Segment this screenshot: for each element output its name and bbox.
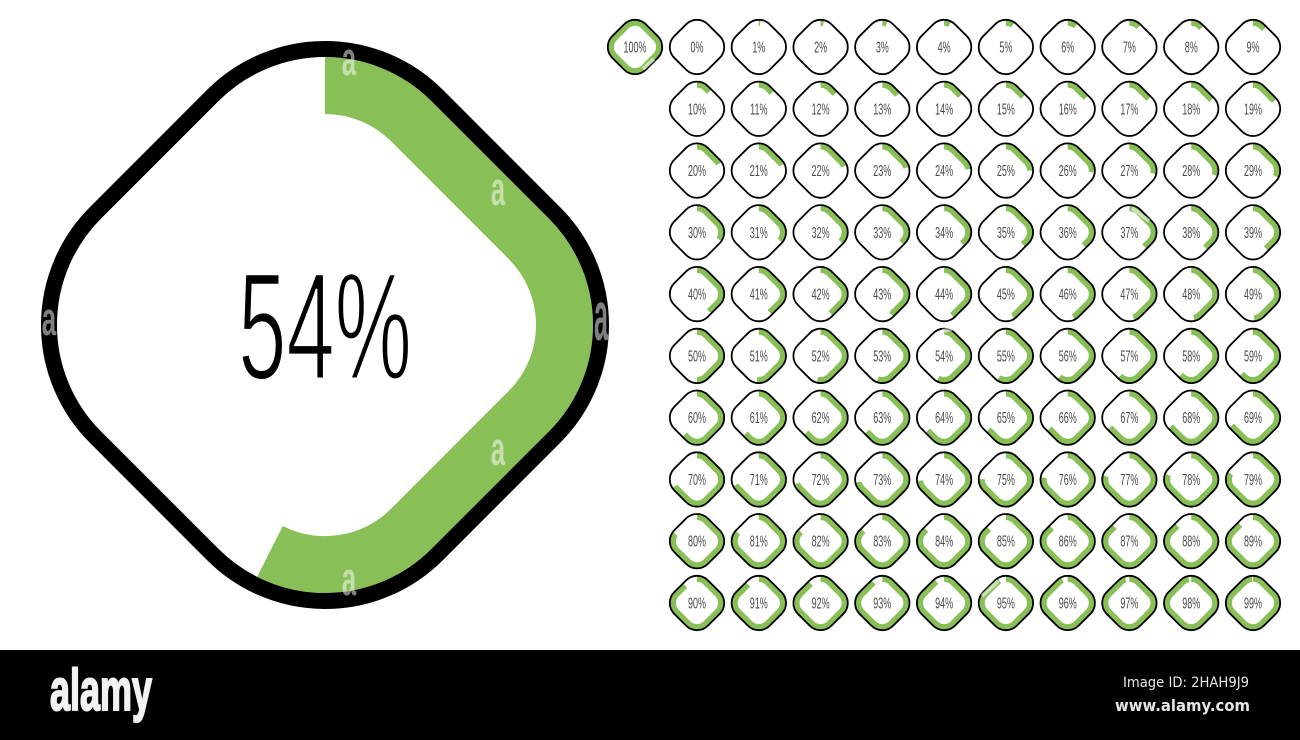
gauge 0%: 0% bbox=[691, 39, 703, 56]
gauge 93%: 93% bbox=[873, 595, 891, 612]
gauge 69%: 69% bbox=[1244, 410, 1262, 427]
gauge 77% bbox=[1102, 452, 1157, 507]
gauge 67%: 67% bbox=[1120, 410, 1138, 427]
gauge 91% bbox=[732, 576, 786, 630]
gauge 57% bbox=[1102, 329, 1157, 383]
small gauge grid bbox=[608, 20, 1280, 630]
gauge 95%: 95% bbox=[997, 595, 1015, 612]
gauge 31% bbox=[732, 205, 786, 260]
gauge 25%: 25% bbox=[997, 163, 1015, 180]
gauge 81%: 81% bbox=[750, 533, 768, 550]
watermark letters bbox=[42, 34, 608, 606]
gauge 31%: 31% bbox=[750, 224, 768, 241]
gauge 8% bbox=[1164, 20, 1218, 74]
gauge 95% bbox=[979, 576, 1033, 630]
gauge 82%: 82% bbox=[812, 533, 830, 550]
gauge 30%: 30% bbox=[688, 224, 706, 241]
gauge 64%: 64% bbox=[935, 410, 953, 427]
gauge 57%: 57% bbox=[1120, 348, 1138, 365]
gauge 46% bbox=[1040, 267, 1095, 321]
gauge 86% bbox=[1040, 514, 1095, 568]
gauge 16%: 16% bbox=[1059, 101, 1077, 118]
gauge 65%: 65% bbox=[997, 410, 1015, 427]
gauge 3% bbox=[855, 20, 910, 74]
gauge 47%: 47% bbox=[1120, 286, 1138, 303]
gauge 43%: 43% bbox=[873, 286, 891, 303]
gauge 15%: 15% bbox=[997, 101, 1015, 118]
gauge 6% bbox=[1040, 20, 1095, 74]
gauge 18% bbox=[1164, 82, 1218, 136]
large gauge: 54% bbox=[49, 49, 601, 601]
gauge 76%: 76% bbox=[1059, 472, 1077, 489]
gauge 89% bbox=[1226, 514, 1280, 568]
gauge 28%: 28% bbox=[1182, 163, 1200, 180]
gauge 37% bbox=[1102, 205, 1157, 260]
gauge 96% bbox=[1040, 576, 1095, 630]
gauge 16% bbox=[1040, 82, 1095, 136]
gauge 39%: 39% bbox=[1244, 224, 1262, 241]
large gauge green arc bbox=[85, 86, 565, 565]
gauge 56% bbox=[1040, 329, 1095, 383]
watermark letters: a bbox=[491, 164, 506, 216]
gauge 12% bbox=[793, 82, 848, 136]
gauge 41% bbox=[732, 267, 786, 321]
gauge 58% bbox=[1164, 329, 1218, 383]
gauge 4%: 4% bbox=[938, 39, 951, 56]
gauge 75% bbox=[979, 452, 1033, 507]
watermark letters: a bbox=[594, 277, 608, 356]
gauge 97% bbox=[1102, 576, 1157, 630]
gauge 56%: 56% bbox=[1059, 348, 1077, 365]
gauge 26%: 26% bbox=[1059, 163, 1077, 180]
gauge 27%: 27% bbox=[1120, 163, 1138, 180]
image id: Image ID: 2HAH9J9 bbox=[1123, 675, 1249, 691]
gauge 78%: 78% bbox=[1182, 472, 1200, 489]
gauge 45% bbox=[979, 267, 1033, 321]
gauge 62%: 62% bbox=[812, 410, 830, 427]
gauge 91%: 91% bbox=[750, 595, 768, 612]
gauge 63%: 63% bbox=[873, 410, 891, 427]
gauge 60% bbox=[670, 390, 724, 445]
gauge 29%: 29% bbox=[1244, 163, 1262, 180]
gauge 74% bbox=[917, 452, 971, 507]
large gauge value: 54% bbox=[238, 241, 412, 412]
gauge 62% bbox=[793, 390, 848, 445]
gauge 37%: 37% bbox=[1120, 224, 1138, 241]
gauge 80% bbox=[670, 514, 724, 568]
gauge 67% bbox=[1102, 390, 1157, 445]
gauge 87%: 87% bbox=[1120, 533, 1138, 550]
gauge 70% bbox=[670, 452, 724, 507]
gauge 69% bbox=[1226, 390, 1280, 445]
gauge 14%: 14% bbox=[935, 101, 953, 118]
gauge 78% bbox=[1164, 452, 1218, 507]
gauge 34% bbox=[917, 205, 971, 260]
gauge 84%: 84% bbox=[935, 533, 953, 550]
gauge 43% bbox=[855, 267, 910, 321]
gauge 68% bbox=[1164, 390, 1218, 445]
gauge 8%: 8% bbox=[1185, 39, 1198, 56]
gauge 94%: 94% bbox=[935, 595, 953, 612]
gauge 17%: 17% bbox=[1120, 101, 1138, 118]
gauge 74%: 74% bbox=[935, 472, 953, 489]
gauge 99% bbox=[1226, 576, 1280, 630]
gauge 59%: 59% bbox=[1244, 348, 1262, 365]
gauge 87% bbox=[1102, 514, 1157, 568]
gauge 6%: 6% bbox=[1061, 39, 1074, 56]
gauge 4% bbox=[917, 20, 971, 74]
gauge 79%: 79% bbox=[1244, 472, 1262, 489]
gauge 55%: 55% bbox=[997, 348, 1015, 365]
gauge 89%: 89% bbox=[1244, 533, 1262, 550]
gauge 50%: 50% bbox=[688, 348, 706, 365]
gauge 58%: 58% bbox=[1182, 348, 1200, 365]
gauge 96%: 96% bbox=[1059, 595, 1077, 612]
watermark letters: a bbox=[491, 424, 506, 476]
gauge 73% bbox=[855, 452, 910, 507]
gauge 72%: 72% bbox=[812, 472, 830, 489]
gauge 20%: 20% bbox=[688, 163, 706, 180]
gauge 15% bbox=[979, 82, 1033, 136]
gauge 13%: 13% bbox=[873, 101, 891, 118]
gauge 47% bbox=[1102, 267, 1157, 321]
gauge 2%: 2% bbox=[814, 39, 827, 56]
gauge 38%: 38% bbox=[1182, 224, 1200, 241]
gauge 12%: 12% bbox=[812, 101, 830, 118]
gauge 19% bbox=[1226, 82, 1280, 136]
gauge 72% bbox=[793, 452, 848, 507]
gauge 85%: 85% bbox=[997, 533, 1015, 550]
gauge 20% bbox=[670, 143, 724, 198]
gauge 33%: 33% bbox=[873, 224, 891, 241]
gauge 46%: 46% bbox=[1059, 286, 1077, 303]
gauge 27% bbox=[1102, 143, 1157, 198]
gauge 11%: 11% bbox=[750, 101, 767, 118]
gauge 22%: 22% bbox=[812, 163, 830, 180]
gauge 17% bbox=[1102, 82, 1157, 136]
gauge 3%: 3% bbox=[876, 39, 889, 56]
gauge 11% bbox=[732, 82, 786, 136]
gauge 13% bbox=[855, 82, 910, 136]
gauge 80%: 80% bbox=[688, 533, 706, 550]
gauge 66% bbox=[1040, 390, 1095, 445]
gauge 24%: 24% bbox=[935, 163, 953, 180]
gauge 10%: 10% bbox=[688, 101, 706, 118]
gauge 70%: 70% bbox=[688, 472, 706, 489]
gauge 77%: 77% bbox=[1120, 472, 1138, 489]
gauge 84% bbox=[917, 514, 971, 568]
gauge 55% bbox=[979, 329, 1033, 383]
gauge 85% bbox=[979, 514, 1033, 568]
gauge 48%: 48% bbox=[1182, 286, 1200, 303]
gauge 83% bbox=[855, 514, 910, 568]
gauge 40%: 40% bbox=[688, 286, 706, 303]
gauge 14% bbox=[917, 82, 971, 136]
gauge 41%: 41% bbox=[750, 286, 768, 303]
gauge 75%: 75% bbox=[997, 472, 1015, 489]
gauge 42%: 42% bbox=[812, 286, 830, 303]
watermark letters: a bbox=[342, 554, 357, 606]
gauge 94% bbox=[917, 576, 971, 630]
gauge 9% bbox=[1226, 20, 1280, 74]
gauge 93% bbox=[855, 576, 910, 630]
gauge 7% bbox=[1102, 20, 1157, 74]
gauge 88% bbox=[1164, 514, 1218, 568]
gauge 83%: 83% bbox=[873, 533, 891, 550]
gauge 99%: 99% bbox=[1244, 595, 1262, 612]
gauge 64% bbox=[917, 390, 971, 445]
gauge 38% bbox=[1164, 205, 1218, 260]
watermark letters: a bbox=[42, 294, 57, 346]
gauge 9%: 9% bbox=[1247, 39, 1259, 56]
gauge 88%: 88% bbox=[1182, 533, 1200, 550]
gauge 76% bbox=[1040, 452, 1095, 507]
gauge 2% bbox=[793, 20, 848, 74]
gauge 50% bbox=[670, 329, 724, 383]
gauge 44%: 44% bbox=[935, 286, 953, 303]
gauge 90% bbox=[670, 576, 724, 630]
gauge 32% bbox=[793, 205, 848, 260]
gauge 53% bbox=[855, 329, 910, 383]
gauge 1% bbox=[732, 20, 786, 74]
gauge 26% bbox=[1040, 143, 1095, 198]
website: www.alamy.com bbox=[1115, 696, 1250, 715]
gauge 19%: 19% bbox=[1244, 101, 1262, 118]
gauge 97%: 97% bbox=[1120, 595, 1138, 612]
gauge 44% bbox=[917, 267, 971, 321]
gauge 60%: 60% bbox=[688, 410, 706, 427]
gauge 21%: 21% bbox=[750, 163, 768, 180]
gauge 33% bbox=[855, 205, 910, 260]
gauge 100%: 100% bbox=[624, 39, 646, 56]
gauge 36%: 36% bbox=[1059, 224, 1077, 241]
gauge 59% bbox=[1226, 329, 1280, 383]
gauge 98%: 98% bbox=[1182, 595, 1200, 612]
gauge 23% bbox=[855, 143, 910, 198]
gauge 90%: 90% bbox=[688, 595, 706, 612]
gauge 24% bbox=[917, 143, 971, 198]
gauge 71% bbox=[732, 452, 786, 507]
gauge 35%: 35% bbox=[997, 224, 1015, 241]
gauge 35% bbox=[979, 205, 1033, 260]
footer bar bbox=[0, 650, 1300, 740]
gauge 40% bbox=[670, 267, 724, 321]
gauge 23%: 23% bbox=[873, 163, 891, 180]
gauge 81% bbox=[732, 514, 786, 568]
gauge 73%: 73% bbox=[873, 472, 891, 489]
gauge 25% bbox=[979, 143, 1033, 198]
gauge 1%: 1% bbox=[752, 39, 765, 56]
gauge 53%: 53% bbox=[873, 348, 891, 365]
gauge 29% bbox=[1226, 143, 1280, 198]
gauge 68%: 68% bbox=[1182, 410, 1200, 427]
gauge 0% bbox=[670, 20, 724, 74]
gauge 51% bbox=[732, 329, 786, 383]
gauge 98% bbox=[1164, 576, 1218, 630]
gauge 100% bbox=[608, 20, 662, 74]
gauge 79% bbox=[1226, 452, 1280, 507]
gauge 61% bbox=[732, 390, 786, 445]
gauge 92% bbox=[793, 576, 848, 630]
gauge 5%: 5% bbox=[999, 39, 1012, 56]
gauge 48% bbox=[1164, 267, 1218, 321]
gauge 66%: 66% bbox=[1059, 410, 1077, 427]
gauge 28% bbox=[1164, 143, 1218, 198]
gauge 34%: 34% bbox=[935, 224, 953, 241]
gauge 61%: 61% bbox=[750, 410, 768, 427]
gauge 49%: 49% bbox=[1244, 286, 1262, 303]
gauge 86%: 86% bbox=[1059, 533, 1077, 550]
gauge 82% bbox=[793, 514, 848, 568]
gauge 30% bbox=[670, 205, 724, 260]
gauge 36% bbox=[1040, 205, 1095, 260]
watermark streaks over small gauges bbox=[643, 59, 1149, 596]
gauge 54% bbox=[917, 329, 971, 383]
gauge 65% bbox=[979, 390, 1033, 445]
gauge 71%: 71% bbox=[750, 472, 768, 489]
gauge 22% bbox=[793, 143, 848, 198]
gauge 18%: 18% bbox=[1182, 101, 1200, 118]
gauge 92%: 92% bbox=[812, 595, 830, 612]
gauge 51%: 51% bbox=[750, 348, 768, 365]
large gauge black outline bbox=[49, 49, 601, 601]
gauge 49% bbox=[1226, 267, 1280, 321]
gauge 52%: 52% bbox=[812, 348, 830, 365]
gauge 32%: 32% bbox=[812, 224, 830, 241]
gauge 45%: 45% bbox=[997, 286, 1015, 303]
gauge 52% bbox=[793, 329, 848, 383]
gauge 54%: 54% bbox=[935, 348, 953, 365]
alamy logo: alamy bbox=[50, 658, 152, 723]
gauge 42% bbox=[793, 267, 848, 321]
watermark letters: a bbox=[342, 34, 357, 86]
gauge 7%: 7% bbox=[1123, 39, 1136, 56]
gauge 21% bbox=[732, 143, 786, 198]
gauge 10% bbox=[670, 82, 724, 136]
gauge 39% bbox=[1226, 205, 1280, 260]
gauge 63% bbox=[855, 390, 910, 445]
gauge 5% bbox=[979, 20, 1033, 74]
